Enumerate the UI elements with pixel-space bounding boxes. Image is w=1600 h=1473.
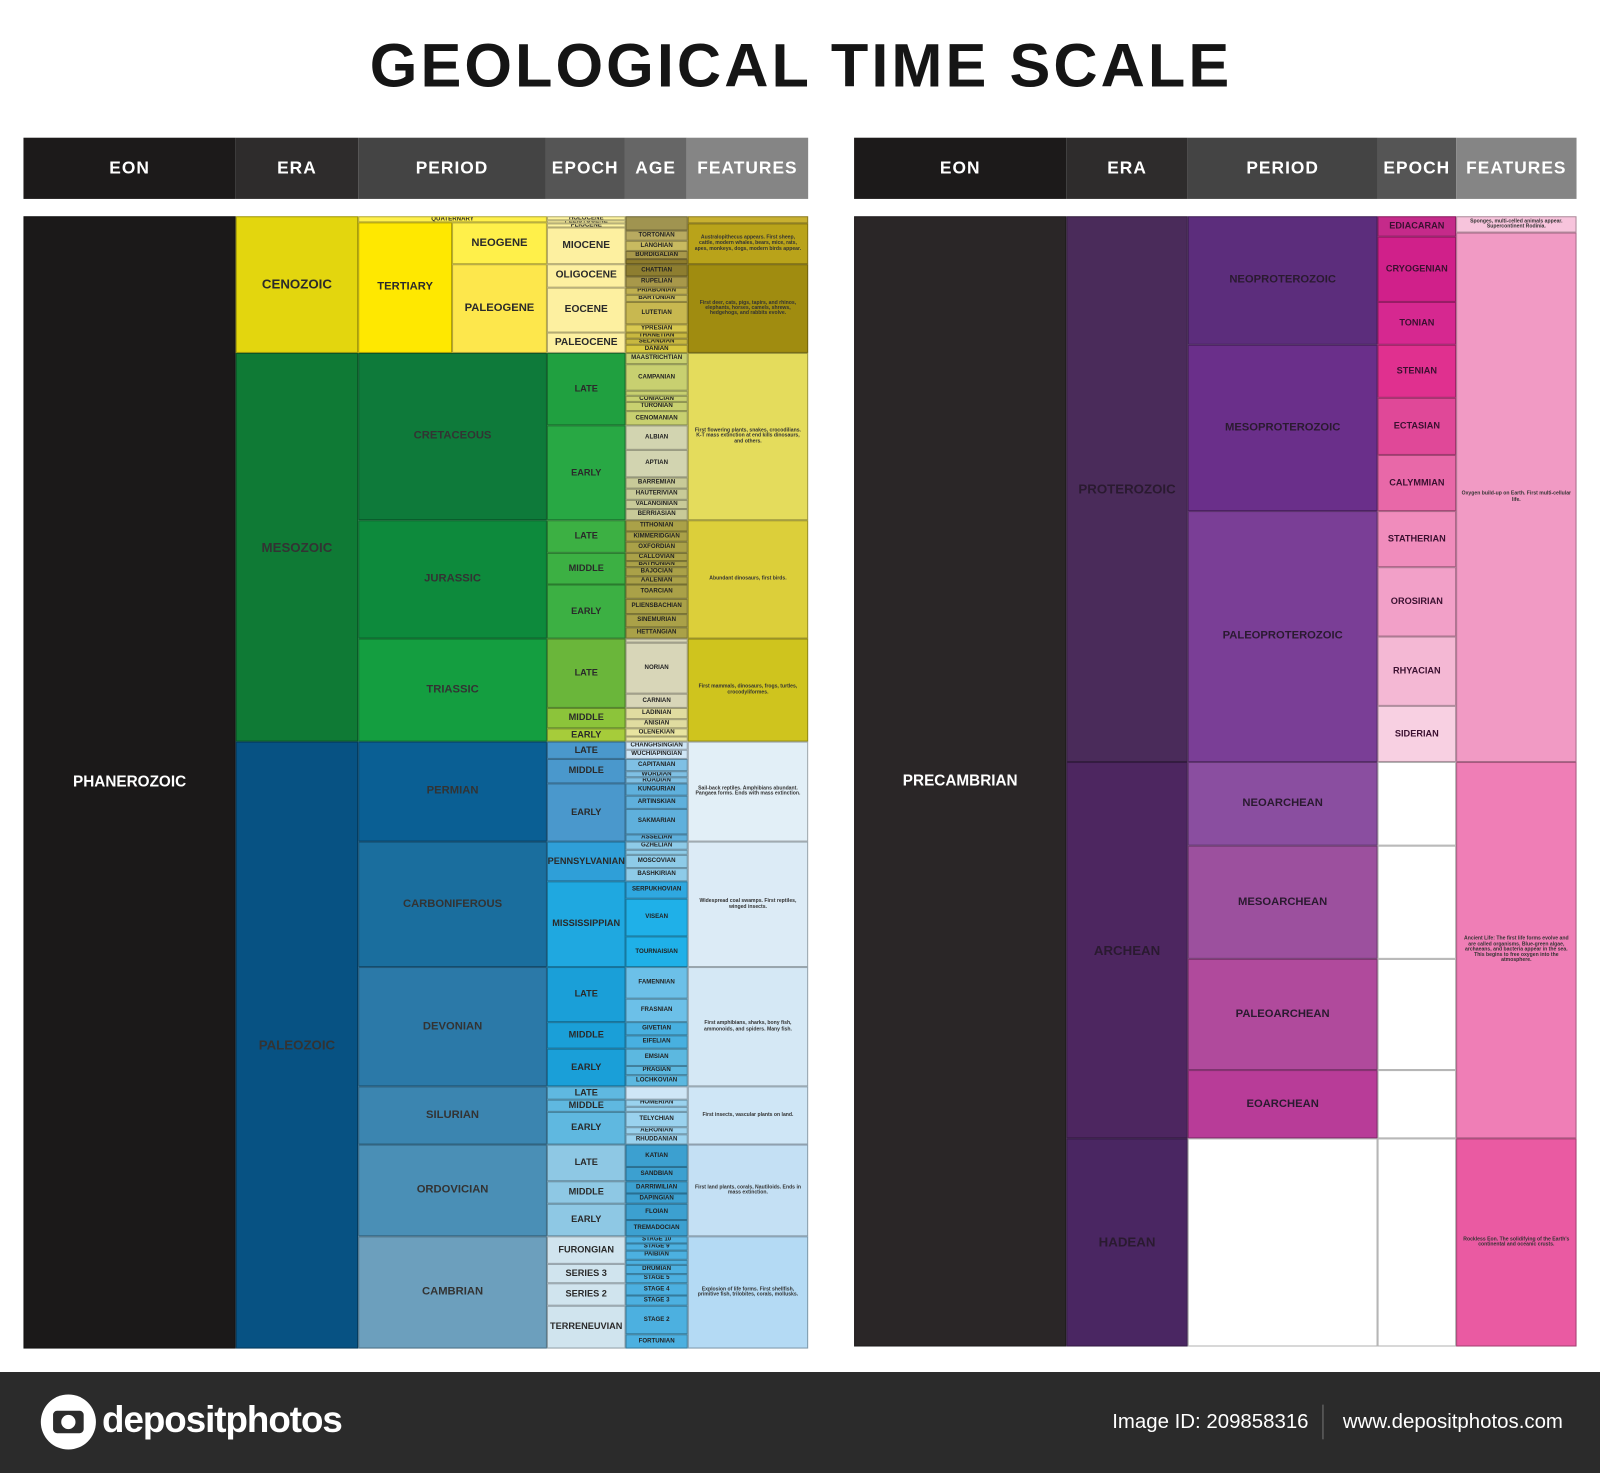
ages column: TITHONIAN (640, 523, 673, 529)
ages column: HETTANGIAN (637, 630, 676, 636)
panel: Phanerozoic table: SERIES 2 (566, 1289, 607, 1299)
panel: Phanerozoic table: LATE (575, 383, 598, 394)
ages column: KUNGURIAN (638, 786, 675, 792)
panel: Phanerozoic table: LATE (575, 531, 598, 541)
ages column: TURONIAN (640, 403, 673, 409)
panel: Precambrian table: HADEAN (1099, 1234, 1155, 1250)
header: right table: ERA (1107, 158, 1147, 177)
ages column: ARTINSKIAN (638, 799, 676, 805)
panel: Phanerozoic table: CAMBRIAN (422, 1286, 483, 1298)
panel: Phanerozoic table: ORDOVICIAN (417, 1184, 488, 1196)
ages column: KIMMERIDGIAN (633, 533, 680, 539)
panel: Phanerozoic table: MIDDLE (569, 1100, 604, 1110)
ages column: ANISIAN (644, 721, 669, 727)
ages column: TELYCHIAN (639, 1116, 674, 1122)
ages column: WORDIAN (642, 771, 672, 777)
panel: Phanerozoic table: CARBONIFEROUS (403, 897, 502, 910)
ages column: STAGE 9 (644, 1244, 670, 1250)
panel: Phanerozoic table: DEVONIAN (423, 1020, 482, 1032)
panel: Phanerozoic table: PERMIAN (427, 785, 478, 797)
header: left table: PERIOD (416, 158, 488, 177)
panel: Phanerozoic table: LATE (575, 1087, 598, 1097)
ages column: STAGE 5 (644, 1275, 670, 1282)
epochs (547, 216, 626, 220)
ages column: THANETIAN (639, 333, 674, 339)
ages column: GZHELIAN (641, 842, 672, 849)
panel: Precambrian table: Rockless Eon. The solidifying of the Earth's continental and oceanic crusts. (1463, 1236, 1569, 1248)
panel: Precambrian table: OROSIRIAN (1391, 596, 1443, 606)
panel: Phanerozoic table: LATE (575, 667, 598, 678)
ages column: LOCHKOVIAN (636, 1078, 677, 1084)
ages column: OXFORDIAN (638, 544, 675, 550)
panel: Phanerozoic table: First amphibians, sharks, bony fish, ammonoids, and spiders. Many fish. (704, 1020, 792, 1032)
panel: Phanerozoic table: PALEOZOIC (259, 1037, 335, 1052)
panel: Precambrian table: CRYOGENIAN (1386, 263, 1448, 274)
ages column: PRIABONIAN (637, 288, 676, 294)
panel: Phanerozoic table: CRETACEOUS (414, 430, 491, 442)
header: left table: ERA (277, 158, 317, 177)
panel: Phanerozoic table: MIDDLE (569, 765, 604, 776)
eras: CENOZOIC (262, 277, 332, 292)
ages column: SERPUKHOVIAN (632, 887, 681, 893)
ages column: YPRESIAN (641, 325, 672, 331)
header: right table: FEATURES (1466, 158, 1567, 177)
ages column: SELANDIAN (639, 339, 674, 345)
periods (1188, 216, 1378, 345)
panel: Phanerozoic table: Widespread coal swamps. First reptiles, winged insects. (699, 898, 796, 909)
ages column: LANGHIAN (640, 243, 673, 249)
panel: Phanerozoic table: EOCENE (565, 304, 608, 315)
panel: Phanerozoic table: SERIES 3 (566, 1268, 607, 1278)
panel: Phanerozoic table: MISSISSIPPIAN (552, 918, 620, 929)
ages column: ROADIAN (642, 777, 671, 783)
ages column: FORTUNIAN (639, 1338, 675, 1344)
eon: Phanerozoic (23, 216, 236, 1349)
ages column: RUPELIAN (641, 279, 672, 285)
features column (688, 216, 808, 223)
panel: Precambrian table: NEOARCHEAN (1242, 797, 1323, 809)
panel: Precambrian table: STATHERIAN (1388, 533, 1446, 543)
ages column: AALENIAN (641, 577, 672, 583)
ages column: DAPINGIAN (639, 1195, 674, 1201)
panel: Phanerozoic table: Sail-back reptiles. Amphibians abundant. Pangaea forms. Ends with mass extinction. (696, 785, 800, 797)
ages column: PAIBIAN (644, 1252, 669, 1258)
panel: Phanerozoic table: PALEOCENE (555, 336, 618, 348)
epochs (1378, 216, 1456, 237)
ages column: BERRIASIAN (638, 511, 676, 518)
panel: Phanerozoic table: MIDDLE (569, 1030, 604, 1040)
ages column: LADINIAN (642, 710, 671, 716)
panel: Phanerozoic table: JURASSIC (424, 572, 481, 585)
ages column: BATHONIAN (638, 561, 675, 567)
ages column: RHUDDANIAN (636, 1136, 677, 1142)
panel: Phanerozoic table: NEOGENE (471, 236, 528, 249)
panel: Phanerozoic table: SILURIAN (426, 1109, 479, 1121)
panel: Precambrian table: TONIAN (1399, 318, 1434, 328)
features (1456, 216, 1577, 233)
panel: Precambrian table: PALEOPROTEROZOIC (1223, 630, 1343, 642)
header: right table (854, 138, 1576, 199)
panel: Phanerozoic table: MIOCENE (562, 239, 610, 251)
ages column: ASSELIAN (641, 835, 672, 841)
header: left table: FEATURES (697, 158, 798, 177)
panel: Phanerozoic table: First mammals, dinosaurs, frogs, turtles, crocodyliformes. (699, 684, 797, 695)
panel: Phanerozoic table (23, 216, 808, 1349)
ages column: NORIAN (645, 665, 669, 671)
ages column: TOARCIAN (641, 588, 673, 595)
ages column: HOMERIAN (640, 1100, 673, 1106)
eon: Precambrian: PRECAMBRIAN (903, 772, 1018, 790)
ages column: STAGE 10 (642, 1237, 671, 1243)
panel: Phanerozoic table: Australopithecus appears. First sheep, cattle, modern whales, bears, mice, rats, apes, monkeys, dogs, modern birds appear. (695, 235, 801, 252)
ages column: PLIENSBACHIAN (631, 603, 682, 609)
ages column: FRASNIAN (641, 1007, 672, 1013)
panel: Precambrian table: SIDERIAN (1395, 728, 1439, 738)
ages column: VALANGINIAN (636, 501, 678, 507)
ages column: MAASTRICHTIAN (631, 355, 682, 361)
panel: Precambrian table: Oxygen build-up on Earth. First multi-cellular life. (1462, 491, 1571, 502)
eon: Precambrian (854, 216, 1066, 1347)
panel: Precambrian table: MESOPROTEROZOIC (1225, 421, 1340, 433)
ages column: CARNIAN (643, 698, 671, 704)
ages column: CONIACIAN (639, 396, 674, 402)
panel: Phanerozoic table: OLIGOCENE (556, 270, 617, 281)
panel: Phanerozoic table: EARLY (571, 1122, 601, 1133)
panel: Precambrian table: CALYMMIAN (1389, 477, 1444, 487)
ages column: SINEMURIAN (637, 617, 676, 624)
panel: Phanerozoic table: Explosion of life forms. First shellfish, primitive fish, trilobites, corals, mollusks. (698, 1286, 798, 1298)
ages column: PRAGIAN (643, 1067, 671, 1073)
eras (1066, 216, 1188, 762)
epochs: EDIACARAN (1389, 221, 1444, 231)
header: right table: EON (940, 158, 981, 177)
panel: Precambrian table: MESOARCHEAN (1238, 895, 1327, 908)
ages column: HAUTERIVIAN (636, 491, 678, 497)
ages column: BAJOCIAN (641, 569, 673, 575)
ages column: DARRIWILIAN (636, 1184, 677, 1190)
panel: Precambrian table: Ancient Life: The first life forms evolve and are called organisms. Blue-green algae, archaeans, and bacteria appear in the sea. This begins to free oxygen into the atmosphere. (1464, 936, 1569, 963)
ages column: BASHKIRIAN (637, 871, 676, 878)
panel: Phanerozoic table: MESOZOIC (262, 539, 332, 555)
ages column: TORTONIAN (639, 232, 675, 239)
ages column: BARREMIAN (638, 480, 675, 486)
panel: Precambrian table: RHYACIAN (1393, 665, 1441, 676)
ages column: CENOMANIAN (636, 415, 678, 421)
ages column: TREMADOCIAN (634, 1225, 680, 1231)
ages column: CAMPANIAN (638, 374, 675, 380)
panel: Phanerozoic table: FURONGIAN (558, 1244, 614, 1254)
header: left table: EPOCH (552, 158, 619, 177)
ages column: DANIAN (645, 346, 669, 352)
panel: Phanerozoic table: MIDDLE (569, 1187, 604, 1197)
ages column: SANDBIAN (640, 1171, 673, 1177)
ages column: KATIAN (645, 1153, 668, 1159)
panel: Precambrian table: PALEOARCHEAN (1236, 1008, 1330, 1020)
ages column: TOURNAISIAN (635, 949, 678, 955)
periods: NEOPROTEROZOIC (1229, 274, 1336, 286)
panel: Phanerozoic table: TRIASSIC (426, 683, 479, 695)
ages column: OLENEKIAN (639, 729, 675, 735)
ages column: SAKMARIAN (638, 818, 675, 825)
panel: Precambrian table (854, 216, 1577, 1346)
panel: Precambrian table: ARCHEAN (1094, 942, 1160, 958)
website: www.depositphotos.com (1343, 1411, 1563, 1433)
eras: PROTEROZOIC (1078, 481, 1176, 496)
ages column: CALLOVIAN (639, 554, 674, 560)
ages column (626, 216, 688, 1349)
panel: Phanerozoic table: EARLY (571, 467, 601, 477)
panel: Phanerozoic table: PALEOGENE (465, 302, 534, 314)
ages column: WUCHIAPINGIAN (631, 751, 682, 757)
header: right table: EPOCH (1383, 158, 1450, 177)
panel: Precambrian table: ECTASIAN (1394, 421, 1440, 431)
ages column: APTIAN (645, 460, 668, 467)
panel: Phanerozoic table: MIDDLE (569, 712, 604, 723)
ages column: FAMENNIAN (638, 980, 675, 986)
panel: Phanerozoic table: First deer, cats, pigs, tapirs, and rhinos, elephants, horses, camels, shrews, hedgehogs, and rabbits evolve. (700, 300, 796, 316)
header: left table (23, 138, 808, 199)
panel: Precambrian table: STENIAN (1397, 365, 1437, 376)
ages column: LUTETIAN (641, 310, 672, 316)
panel: Phanerozoic table: EARLY (571, 606, 601, 616)
image id: Image ID: 209858316 (1112, 1411, 1309, 1433)
panel: Phanerozoic table: EARLY (571, 1214, 601, 1224)
footer bar (0, 1372, 1600, 1473)
panel: Phanerozoic table: First flowering plants, snakes, crocodilians. K-T mass extinction at end kills dinosaurs, and others. (695, 428, 801, 444)
panel: Phanerozoic table: LATE (575, 744, 598, 755)
panel: Phanerozoic table: TERRENEUVIAN (550, 1321, 622, 1331)
ages column: EIFELIAN (643, 1039, 671, 1045)
ages column: STAGE 2 (644, 1317, 670, 1323)
ages column: BARTONIAN (638, 295, 675, 301)
periods: QUATERNARY (431, 216, 474, 222)
ages column: CHANGHSINGIAN (630, 742, 683, 749)
panel: Phanerozoic table: EARLY (571, 1062, 601, 1072)
periods (358, 216, 547, 222)
ages column: BURDIGALIAN (635, 252, 678, 258)
header: right table: PERIOD (1246, 158, 1319, 177)
header: left table: AGE (635, 158, 676, 177)
ages column: FLOIAN (645, 1209, 668, 1215)
title: GEOLOGICAL TIME SCALE (370, 32, 1232, 100)
ages column: CHATTIAN (641, 267, 672, 273)
ages column: CAPITANIAN (638, 762, 675, 768)
panel: Phanerozoic table: PENNSYLVANIAN (548, 856, 625, 866)
panel: Precambrian table: EOARCHEAN (1246, 1097, 1319, 1110)
panel: Phanerozoic table: LATE (575, 1157, 598, 1167)
ages column: STAGE 4 (644, 1286, 670, 1292)
panel: Phanerozoic table: Abundant dinosaurs, first birds. (709, 576, 787, 582)
ages column: AERONIAN (640, 1128, 673, 1134)
ages column: MOSCOVIAN (638, 858, 676, 864)
ages column: EMSIAN (645, 1054, 669, 1060)
panel: Phanerozoic table: EARLY (571, 729, 601, 739)
panel: Phanerozoic table: First land plants, corals, Nautiloids. Ends in mass extinction. (695, 1184, 801, 1196)
ages column: GIVETIAN (642, 1026, 671, 1032)
eon: Phanerozoic: PHANEROZOIC (73, 773, 186, 791)
ages column: ALBIAN (645, 434, 668, 441)
panel: Phanerozoic table: EARLY (571, 807, 601, 817)
panel: Phanerozoic table: First insects, vascular plants on land. (702, 1112, 793, 1118)
panel: Phanerozoic table: MIDDLE (569, 563, 604, 573)
features: Sponges, multi-celled animals appear. Supercontinent Rodinia. (1470, 218, 1563, 230)
panel: Phanerozoic table: TERTIARY (377, 281, 433, 293)
header: left table: EON (109, 158, 150, 177)
logo text: depositphotos (102, 1399, 342, 1440)
ages column: STAGE 3 (644, 1297, 670, 1304)
ages column: VISEAN (645, 914, 668, 920)
icon: camera logo (41, 1394, 96, 1450)
eras (236, 216, 358, 353)
ages column: DRUMIAN (642, 1266, 671, 1272)
panel: Phanerozoic table: LATE (575, 989, 598, 999)
